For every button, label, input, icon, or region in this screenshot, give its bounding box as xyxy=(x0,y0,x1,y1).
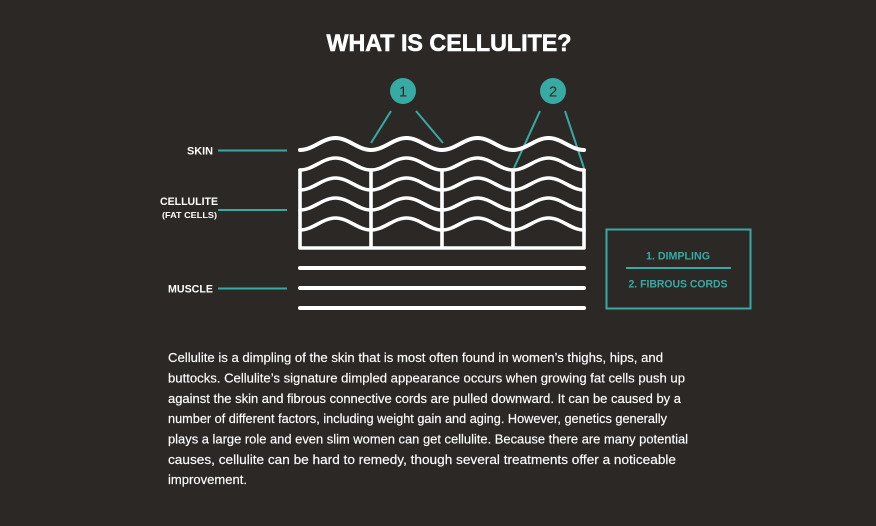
icon: marker 2 with pointers xyxy=(514,78,584,168)
label: cellulite xyxy=(160,196,287,220)
icon: marker 1 with pointers: 1 xyxy=(399,84,407,100)
icon: marker 1 with pointers xyxy=(371,78,443,143)
skin wave xyxy=(300,138,584,150)
diagram: skin and fat layers xyxy=(300,78,584,308)
legend box xyxy=(606,230,750,308)
label: cellulite: CELLULITE xyxy=(160,196,218,208)
label: skin xyxy=(187,146,287,158)
legend box: 1. DIMPLING xyxy=(646,250,710,262)
label: muscle: MUSCLE xyxy=(168,284,213,296)
body text xyxy=(168,351,688,487)
body text: buttocks. Cellulite’s signature dimpled appearance occurs when growing fat cells push up xyxy=(168,372,685,386)
fat cell grid xyxy=(300,158,584,248)
label: skin: SKIN xyxy=(187,146,213,158)
title: WHAT IS CELLULITE? xyxy=(326,30,572,57)
icon: marker 2 with pointers: 2 xyxy=(549,84,557,100)
body text: causes, cellulite can be hard to remedy, though several treatments offer a noticeable xyxy=(168,453,676,467)
body text: Cellulite is a dimpling of the skin that is most often found in women’s thighs, hips, and xyxy=(168,351,663,365)
legend box: 2. FIBROUS CORDS xyxy=(628,278,728,290)
body text: plays a large role and even slim women can get cellulite. Because there are many potential xyxy=(168,432,688,446)
body text: improvement. xyxy=(168,473,247,487)
body text: against the skin and fibrous connective cords are pulled downward. It can be caused by a xyxy=(168,392,681,406)
muscle lines xyxy=(300,268,584,308)
label: muscle xyxy=(168,284,287,296)
body text: number of different factors, including weight gain and aging. However, genetics generally xyxy=(168,412,668,426)
label: cellulite: (FAT CELLS) xyxy=(162,210,217,220)
